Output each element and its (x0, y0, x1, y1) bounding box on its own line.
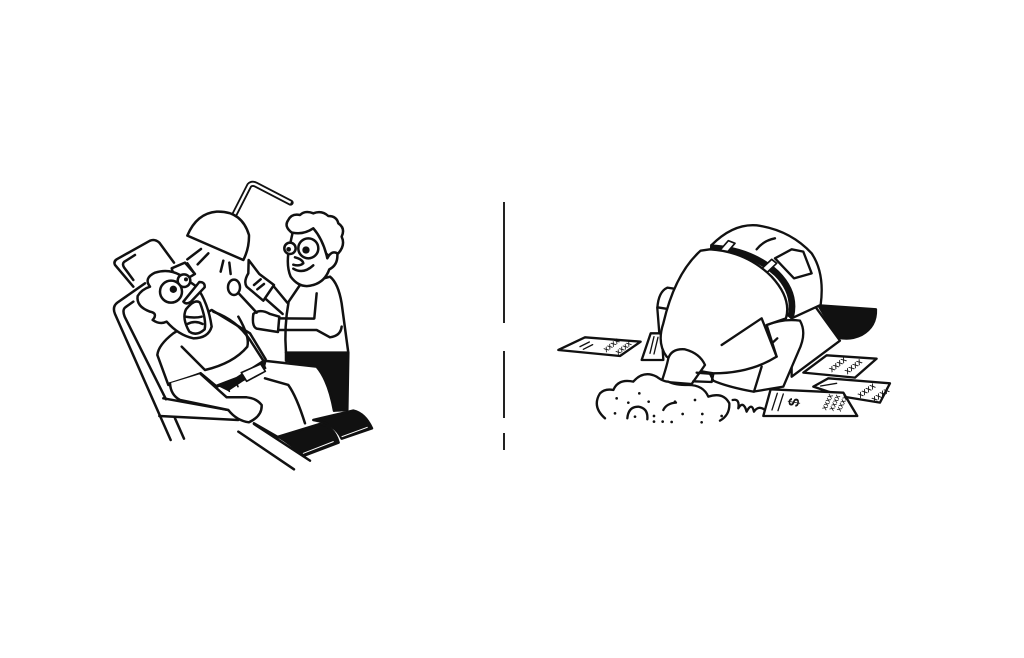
patient shoes (313, 411, 372, 439)
coat tail (792, 304, 840, 377)
panel: dentist scene (114, 184, 372, 469)
dentist legs (286, 353, 348, 411)
neck going in the sand (662, 349, 705, 384)
right papers text (827, 355, 891, 404)
back pocket (775, 249, 812, 278)
bill text: XXXX (821, 393, 835, 411)
lamp (187, 212, 249, 260)
paper: left (558, 333, 663, 360)
patient headrest pad (172, 263, 195, 285)
patient bib straps (182, 317, 248, 370)
dental mirror (239, 294, 257, 313)
belt loops (717, 241, 735, 258)
bill text: XXXX (836, 394, 850, 413)
patient belt (217, 361, 266, 391)
right papers text: XXXX (856, 381, 877, 400)
right papers text: XXXX (870, 386, 891, 404)
right papers text: XXXX (827, 355, 848, 374)
lamp arm (232, 184, 291, 219)
patient head (137, 271, 212, 338)
dentist curly hair (287, 212, 343, 257)
trousers back (712, 225, 822, 318)
sand pile (597, 374, 729, 421)
patient torso (157, 310, 266, 387)
right papers text: XXXX (843, 357, 864, 376)
dentist glasses (298, 238, 318, 258)
leg (707, 320, 803, 392)
bill text: XXXX (829, 393, 843, 412)
dentist head (284, 212, 343, 286)
document text: XXXX: XXXX (603, 337, 622, 354)
bill text (786, 393, 850, 413)
panel: head in the sand (558, 225, 891, 424)
lamp rays (187, 249, 231, 274)
document text: XXXX (603, 337, 634, 357)
sand grains (614, 392, 723, 424)
dentist body (285, 277, 348, 353)
shirt (661, 249, 787, 373)
dental chair (114, 240, 310, 469)
bill text: $ (786, 396, 804, 408)
patient trousers (223, 343, 334, 437)
belt (710, 248, 792, 317)
dollar bill (763, 389, 857, 416)
patient arm (170, 374, 262, 422)
patient open mouth (184, 301, 205, 334)
document text: XXXX: XXXX (615, 340, 634, 357)
fingers (733, 400, 765, 412)
dentist arm (265, 285, 287, 314)
arm behind (657, 288, 678, 335)
cape (818, 305, 876, 339)
vertical divider (503, 202, 505, 450)
papers: right (803, 355, 890, 403)
dentist gloved hands (245, 260, 274, 301)
